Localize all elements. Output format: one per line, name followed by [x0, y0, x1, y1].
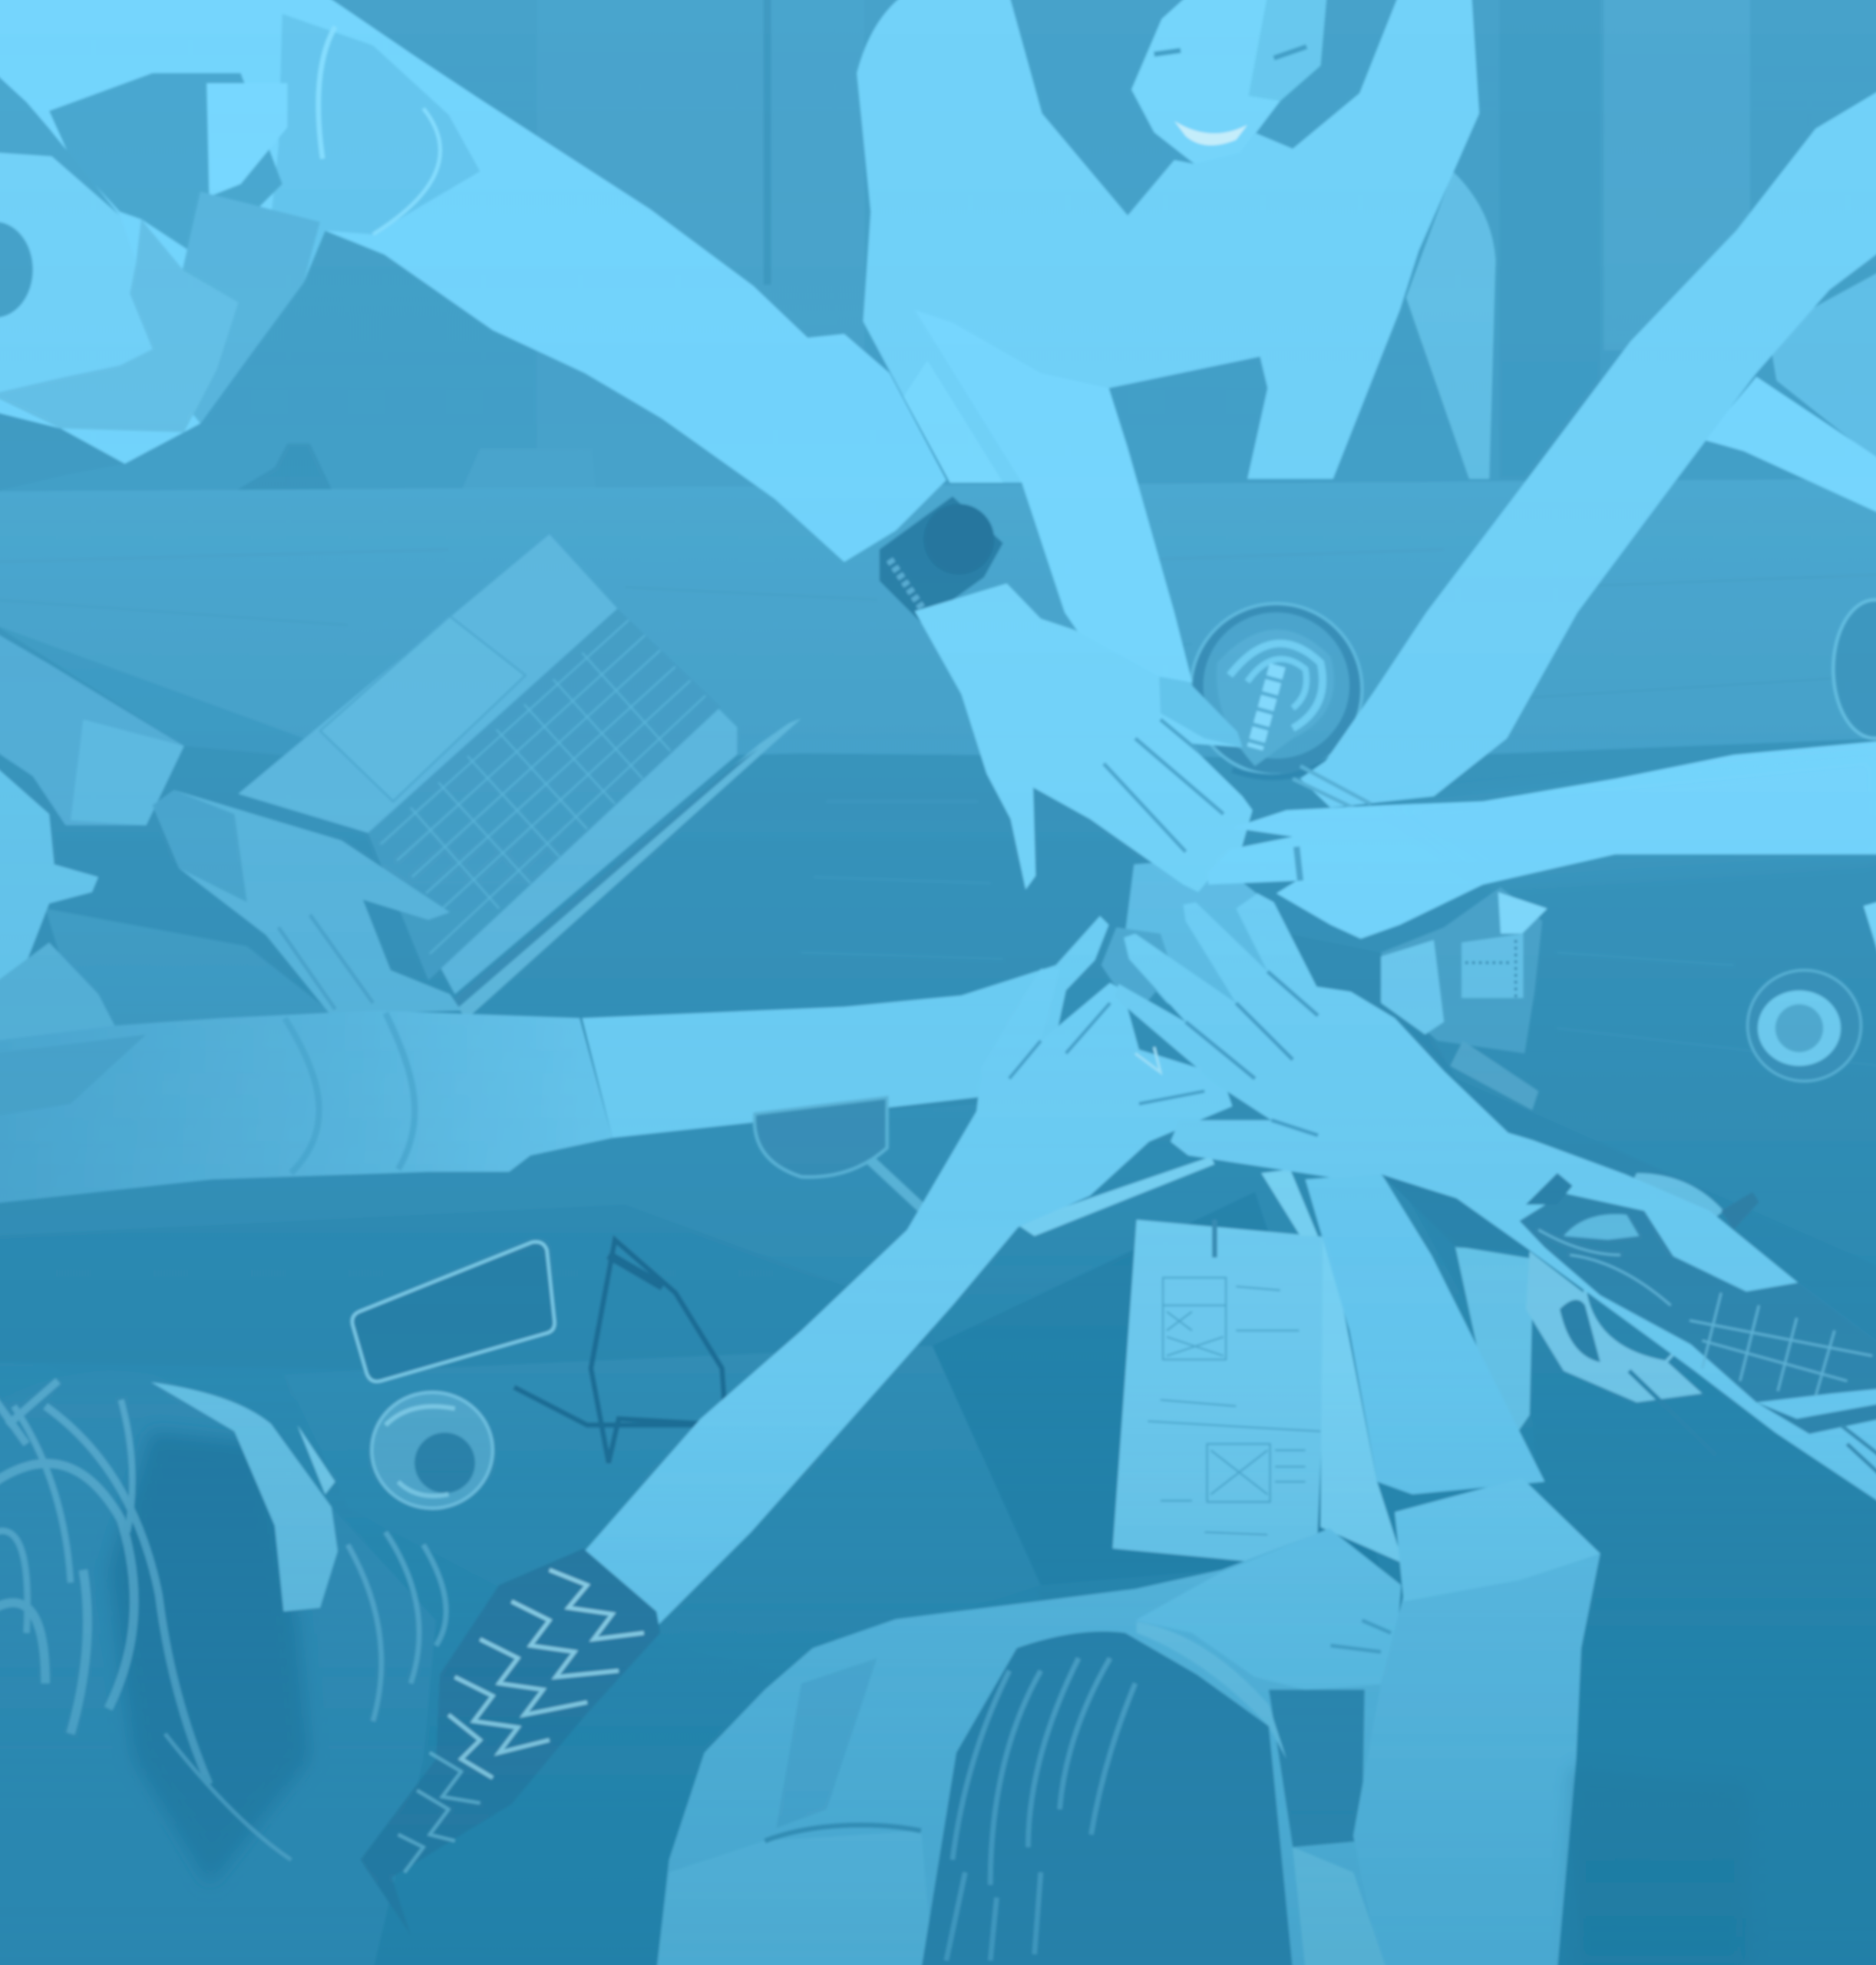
notebook second page — [1455, 1246, 1534, 1457]
hair: woman bottom left — [0, 1372, 446, 1965]
paper clip — [1213, 1220, 1216, 1257]
man's head with beard, top left — [0, 73, 238, 491]
central palm stack beneath fingers — [1101, 858, 1293, 1041]
lemon drink glass — [1748, 970, 1861, 1081]
stacked hand from top left arm — [915, 583, 1253, 892]
chair behind the woman — [1406, 171, 1495, 479]
lower left arm — [585, 1111, 1018, 1626]
woman's hair and face, top centre — [1009, 0, 1399, 216]
hand from lower left arm — [907, 969, 1232, 1230]
soft shadow details for depth — [1381, 751, 1876, 1965]
coffee glass below left arm — [755, 1098, 925, 1210]
person top left: shirt and arm — [0, 0, 946, 562]
table top — [0, 479, 1876, 1965]
left person: hand on laptop — [153, 790, 461, 1014]
phone — [352, 1242, 554, 1382]
patterned sleeve — [360, 1548, 660, 1935]
dark gap beside bottom person's head — [1269, 1689, 1365, 1847]
items on the far side of the table — [234, 444, 596, 491]
left person: long sleeve reaching centre — [0, 1010, 613, 1204]
tattooed hand and forearm reaching left — [1114, 893, 1876, 1503]
thin device edges near hands — [1016, 1157, 1318, 1236]
person top right: long arm and second arm — [1293, 90, 1876, 814]
left person: upper sleeve — [0, 632, 184, 825]
person top centre: sweater — [857, 0, 1479, 707]
dark wedge under the tattooed arm — [1381, 1174, 1530, 1251]
hand from right arm — [1208, 741, 1876, 939]
person bottom: rolled sleeve and arm — [1293, 1478, 1600, 1965]
notebook sketches — [1148, 1277, 1320, 1534]
plate under tattooed arm — [1526, 1173, 1759, 1455]
notebook — [1112, 1220, 1330, 1561]
arm tattoo — [1520, 1173, 1876, 1475]
laptop — [238, 534, 801, 1019]
drinking glass — [372, 1392, 493, 1508]
latte cup — [1191, 603, 1362, 777]
left person: shoulder curve — [0, 766, 114, 1041]
laptop keyboard keys — [381, 620, 705, 954]
person bottom: hair on head — [921, 1622, 1293, 1965]
wrist watch — [880, 497, 1003, 623]
eyeglasses — [514, 1240, 725, 1463]
person bottom: raised forearm — [1306, 1173, 1544, 1564]
paper corner and cup on the right edge — [1833, 599, 1876, 963]
person bottom: hand on notebook — [1135, 1528, 1401, 1689]
person bottom: shirt back — [656, 1528, 1401, 1965]
espresso machine and paper cup right of hands — [1381, 887, 1547, 1110]
left person: bare forearm and hand — [582, 916, 1108, 1138]
